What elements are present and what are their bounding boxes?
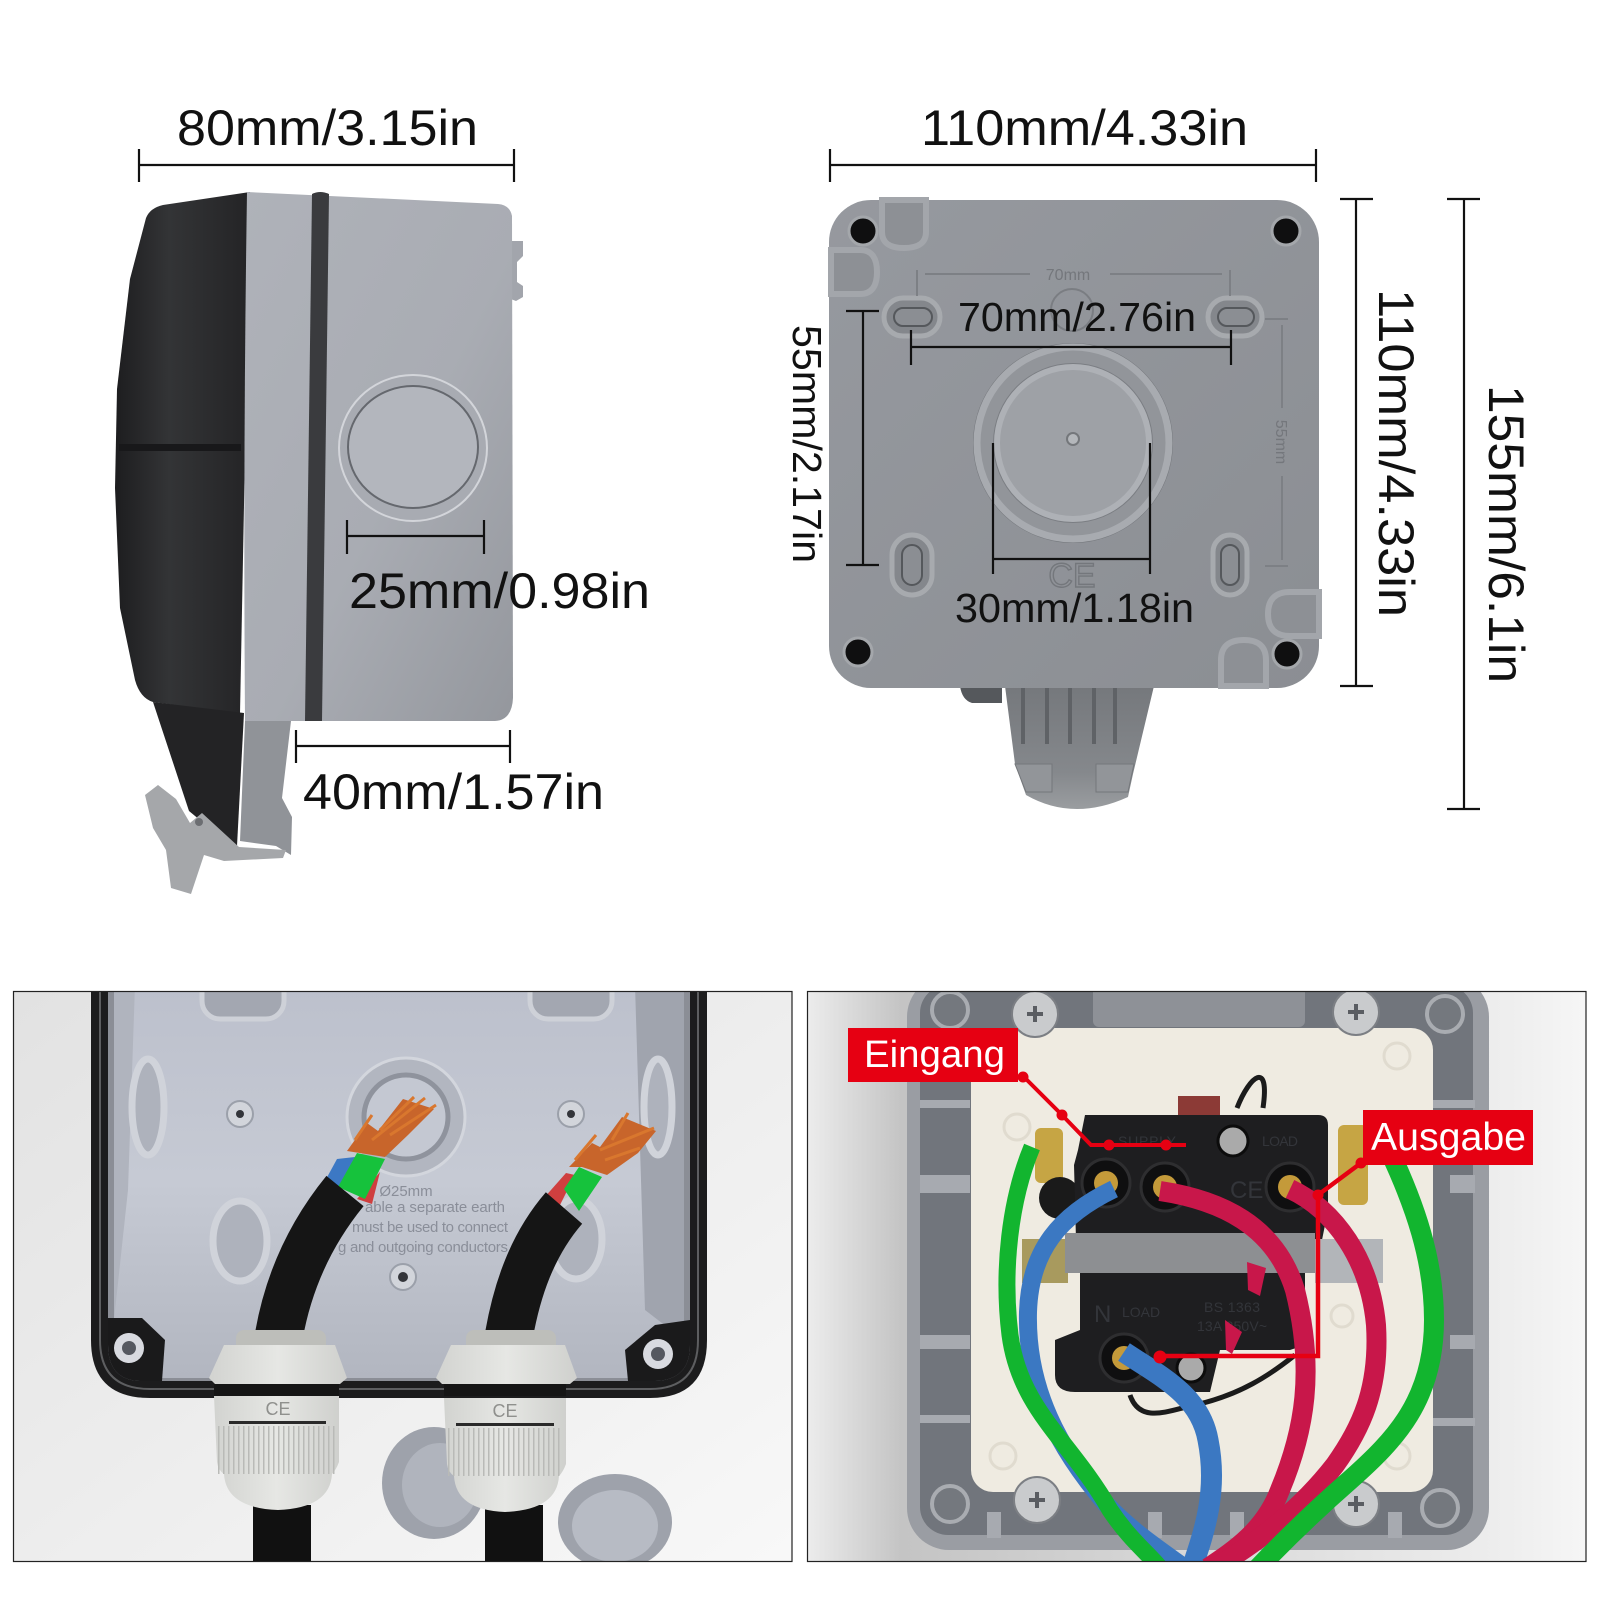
embossed 55mm mark — [1265, 319, 1289, 566]
dimension: 155mm total height — [1447, 199, 1534, 809]
corner bosses and screws — [932, 989, 1463, 1527]
right cable gland — [436, 1330, 577, 1565]
knockout cap behind left gland — [382, 1427, 486, 1539]
grey hinge block — [240, 721, 292, 855]
metal strap — [1065, 1233, 1315, 1273]
flap catch tabs — [1015, 764, 1134, 792]
red wire: live out — [1215, 1189, 1377, 1568]
earth terminal right — [1338, 1125, 1368, 1205]
loose black wire — [1130, 1355, 1295, 1413]
dimension: 110mm back height: 110mm/4.33in — [1368, 289, 1424, 617]
flap ribs — [1023, 688, 1115, 744]
lower switch body — [1055, 1270, 1305, 1392]
plate moulded dimples — [990, 1043, 1410, 1469]
red fuse tab — [1178, 1096, 1220, 1116]
red fragments on switch — [1225, 1262, 1266, 1354]
label: Eingang — [848, 1028, 1018, 1082]
earth terminal left — [1035, 1128, 1075, 1218]
switch engraving: N — [1094, 1301, 1111, 1328]
photo background — [14, 992, 792, 1562]
dimension: 30mm knockout: 30mm/1.18in — [955, 585, 1194, 631]
dimension: 25mm knockout: 25mm/0.98in — [349, 563, 650, 619]
switch engraving: LOAD — [1122, 1304, 1160, 1320]
dimension: 40mm: 40mm/1.57in — [303, 764, 604, 820]
left wall — [114, 985, 135, 1320]
central knockout rings — [973, 343, 1173, 543]
right copper strands — [569, 1113, 656, 1175]
embossed CE mark: CE — [1048, 557, 1096, 595]
right cable gland: CE — [492, 1401, 518, 1421]
black front cover — [115, 192, 250, 714]
embossed 55mm mark: 55mm — [1272, 420, 1289, 464]
mounting slots — [884, 298, 1262, 595]
embossed instructions: Ø25mm — [379, 1183, 433, 1200]
back plate — [829, 200, 1319, 688]
cover seam — [119, 444, 241, 451]
black box rim — [91, 985, 707, 1398]
corner ear tabs — [831, 200, 1319, 686]
latch screw — [195, 818, 203, 826]
flap hinge nub — [960, 686, 1002, 703]
embossed instructions — [338, 1183, 509, 1256]
side clips — [920, 1100, 1475, 1538]
panel: photo of wired socket with labels — [808, 975, 1586, 1568]
dimension: 110mm back width — [830, 100, 1316, 182]
left copper strands — [347, 1097, 436, 1157]
dimension: 70mm slot spacing: 70mm/2.76in — [958, 294, 1196, 340]
strap clamp left — [1022, 1239, 1068, 1283]
panel: photo of open box with cable glands — [14, 975, 792, 1570]
panel: back view of switch box — [829, 200, 1319, 809]
top latch — [1093, 992, 1305, 1027]
mounting screw holes — [844, 217, 1301, 668]
blue wire: neutral in — [1028, 1189, 1185, 1568]
label: Eingang: Eingang — [864, 1034, 1005, 1076]
embossed IP badge — [1051, 289, 1093, 331]
strap clamp right — [1315, 1239, 1383, 1283]
rim grey line — [100, 985, 698, 1389]
embossed instructions: able a separate earth — [365, 1199, 505, 1216]
cream socket plate — [971, 1028, 1433, 1492]
photo frame: wiring — [808, 992, 1586, 1562]
left cable gland — [209, 1330, 347, 1565]
left cable wires — [325, 1153, 385, 1204]
dimension: 155mm total height: 155mm/6.1in — [1478, 385, 1534, 683]
lower screw — [1177, 1354, 1205, 1382]
embossed instructions: must be used to connect — [352, 1219, 509, 1236]
oval drains — [132, 1059, 672, 1281]
terminal holes — [1082, 1159, 1314, 1382]
side tab — [508, 241, 523, 301]
dimension: 40mm — [296, 730, 604, 820]
knockout circle — [339, 375, 487, 521]
left cable gland: CE — [265, 1399, 291, 1419]
corner screw bosses — [108, 1318, 690, 1381]
dimension: 55mm slot spacing — [784, 311, 879, 565]
rubber gasket strip — [305, 192, 329, 721]
screw post holes — [236, 1110, 575, 1282]
panel: side view of switch box — [115, 192, 523, 894]
enclosure inner — [920, 985, 1473, 1535]
dimension: 110mm back height — [1340, 199, 1424, 686]
dimension: 80mm side width: 80mm/3.15in — [177, 100, 478, 156]
slot openings — [894, 308, 1254, 585]
switch engraving: CE — [1230, 1177, 1263, 1204]
right cable wires — [543, 1167, 602, 1211]
right black cable — [509, 1208, 564, 1335]
grey enclosure — [907, 975, 1489, 1550]
lower black wedge — [153, 702, 244, 846]
right wall shade — [635, 985, 684, 1340]
green wire right — [1258, 1150, 1434, 1568]
switch engraving: BS 1363 — [1204, 1299, 1260, 1315]
photo frame: cable glands — [14, 992, 792, 1562]
box floor — [114, 985, 684, 1378]
dimension: 110mm back width: 110mm/4.33in — [921, 100, 1248, 156]
grey body — [244, 192, 513, 721]
bottom flap — [1005, 686, 1154, 809]
dimension: 80mm side width — [139, 100, 514, 182]
blue wire: neutral out — [1124, 1352, 1212, 1568]
switch engraving: 13A 250V~ — [1197, 1318, 1267, 1334]
knockout cap lower right — [558, 1474, 672, 1570]
upper switch body — [1074, 1115, 1328, 1240]
screw posts — [227, 1101, 584, 1290]
label: Ausgabe: Ausgabe — [1371, 1116, 1526, 1159]
embossed instructions: g and outgoing conductors — [338, 1239, 508, 1256]
centre screw — [1218, 1126, 1248, 1156]
callout line: Eingang — [1018, 1072, 1186, 1150]
central knockout — [347, 1058, 465, 1176]
green wire left — [1007, 1147, 1160, 1568]
fuse wires top — [1237, 1077, 1264, 1108]
switch engraving: SUPPLY — [1118, 1133, 1177, 1149]
switch engraving — [1094, 1133, 1298, 1334]
switch engraving: LOAD — [1262, 1133, 1298, 1149]
red wire: live in — [1160, 1191, 1306, 1568]
dimension: 25mm knockout — [347, 520, 650, 619]
dimension: 30mm knockout — [955, 443, 1194, 631]
dimension: 70mm slot spacing — [911, 294, 1231, 365]
photo background — [808, 992, 1586, 1562]
dimension: 55mm slot spacing: 55mm/2.17in — [784, 325, 830, 563]
grey latch — [145, 785, 286, 894]
embossed 70mm mark — [917, 267, 1230, 296]
box interior — [108, 985, 690, 1381]
top oval mounts — [200, 992, 614, 1022]
embossed 70mm mark: 70mm — [1046, 267, 1090, 284]
callout line: Ausgabe — [1154, 1158, 1366, 1364]
left black cable — [279, 1191, 345, 1335]
